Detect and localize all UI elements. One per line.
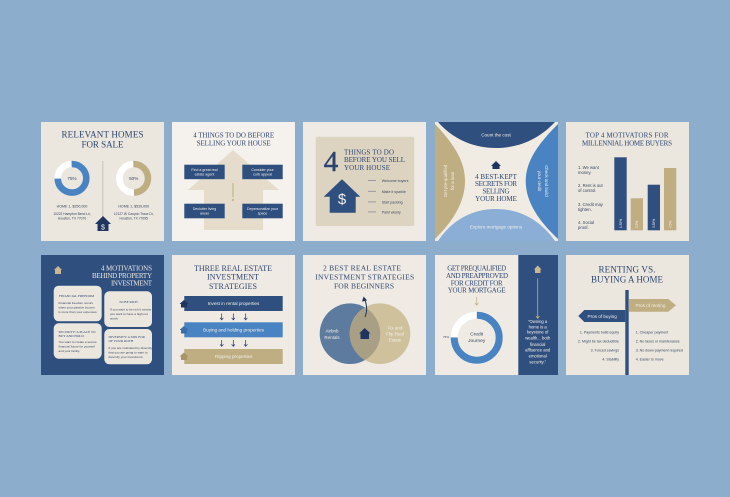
heading bbox=[582, 131, 672, 148]
venn diagram bbox=[320, 303, 410, 364]
sign: pros of buying: Pros of buying bbox=[588, 314, 617, 319]
listing: home 1 bbox=[53, 204, 91, 220]
listing: home 2: Houston, TX 77095 bbox=[120, 216, 148, 220]
heading: RENTING VS. bbox=[598, 264, 656, 274]
box: depersonalize: space bbox=[258, 212, 267, 216]
panel: 4 motivations behind property investment bbox=[41, 255, 164, 375]
panel: 4 best-kept secrets bbox=[435, 122, 558, 241]
box: declutter: Declutter living bbox=[193, 207, 216, 211]
icon: house bbox=[54, 266, 62, 274]
box: curb appeal bbox=[242, 165, 283, 179]
top segment: count the cost: Count the cost bbox=[481, 132, 512, 138]
box: declutter: areas bbox=[200, 212, 209, 216]
quote text: security.” bbox=[529, 359, 547, 364]
card: financial freedom: Financial freedom occurs bbox=[58, 301, 94, 305]
heading: YOUR MORTGAGE bbox=[448, 286, 506, 294]
card: diversity: that you are going to want to bbox=[108, 350, 148, 354]
heading: relevant homes bbox=[62, 129, 144, 149]
bar: buying and holding: Buying and holding properties bbox=[203, 328, 265, 332]
motivators list: proof. bbox=[578, 225, 589, 230]
card: diversity: OF YOUR ROTH bbox=[108, 339, 134, 343]
listing: home 1: Houston, TX 77070 bbox=[58, 216, 86, 220]
box: real estate agent: estate agent bbox=[195, 173, 214, 177]
right segment: check and build credit: Check and build bbox=[544, 165, 549, 197]
heading bbox=[344, 148, 405, 172]
motivators list: tighten. bbox=[578, 207, 592, 212]
heading: SELLING bbox=[482, 187, 510, 195]
arrow: long down bbox=[536, 278, 539, 318]
panel: top 4 motivators bbox=[566, 122, 689, 241]
venn diagram: Fix and bbox=[388, 326, 403, 330]
quote text: emotional bbox=[529, 353, 547, 358]
donut chart: credit journey: Journey bbox=[468, 338, 486, 344]
bar chart bbox=[614, 157, 676, 230]
right segment: check and build credit bbox=[526, 124, 558, 239]
quote text bbox=[525, 319, 551, 364]
list: buying bbox=[578, 330, 619, 362]
motivators list: 4. Social bbox=[578, 220, 594, 225]
list: renting: 4. Easier to move bbox=[636, 358, 664, 362]
card: to be rich: worth. bbox=[110, 316, 119, 320]
arrow: curved bbox=[362, 298, 367, 317]
heading bbox=[446, 264, 508, 294]
list: renting bbox=[636, 330, 683, 362]
heading: relevant homes: FOR SALE bbox=[82, 139, 124, 149]
card: diversity: diversify your investment. bbox=[108, 355, 144, 359]
venn diagram: Airbnb bbox=[325, 328, 339, 334]
card: security: SECURITY: A PLACE TO bbox=[58, 330, 96, 334]
heading bbox=[194, 264, 272, 291]
house shape bbox=[188, 150, 279, 230]
motivators list: 2. Rent is out bbox=[578, 183, 604, 188]
heading: relevant homes: RELEVANT HOMES bbox=[62, 129, 144, 139]
card: security: You want to create a secure bbox=[58, 340, 97, 344]
card: to be rich: If you want to be rich it means bbox=[110, 308, 152, 312]
heading bbox=[315, 264, 414, 290]
card: financial freedom: when your passive income bbox=[58, 306, 95, 310]
icon: house with dollar: $ bbox=[338, 191, 347, 208]
heading: 4 BEST-KEPT bbox=[475, 173, 518, 181]
heading bbox=[193, 132, 274, 148]
icon: house with dollar: $ bbox=[101, 224, 105, 232]
quote text: keystone of bbox=[527, 330, 549, 335]
checklist: Paint wisely bbox=[382, 210, 401, 214]
panel: 4 things to do before selling your house bbox=[172, 122, 295, 241]
panel: three real estate investment strategies bbox=[172, 255, 295, 375]
card: financial freedom: is more than your expenses. bbox=[58, 310, 98, 314]
donut chart: credit journey bbox=[443, 314, 500, 361]
card: diversity: If you are motivated by diversity bbox=[108, 346, 152, 350]
heading: TOP 4 MOTIVATORS FOR bbox=[586, 131, 669, 139]
listing: home 2: HOME 1, $539,000 bbox=[118, 204, 149, 208]
bar chart: 3.35% bbox=[652, 219, 656, 228]
donut chart: credit journey: 75% bbox=[443, 335, 449, 339]
heading bbox=[92, 265, 153, 287]
card: security: and your family. bbox=[58, 349, 80, 353]
panel: renting vs buying bbox=[566, 255, 689, 375]
card: to be rich: TO BE RICH bbox=[119, 300, 138, 304]
box: depersonalize: Depersonalize your bbox=[247, 207, 279, 211]
icon: house bbox=[359, 328, 370, 339]
list: buying: 4. Stability bbox=[602, 358, 619, 362]
heading: GET PREQUALIFIED bbox=[447, 264, 506, 272]
panel: relevant homes for sale bbox=[41, 122, 164, 241]
checklist bbox=[368, 179, 409, 214]
listing: home 1: HOME 1, $250,000 bbox=[57, 204, 87, 208]
quote text: “Owning a bbox=[528, 319, 548, 324]
venn diagram: Estate bbox=[389, 338, 402, 342]
motivators list: 3. Credit may bbox=[578, 202, 604, 207]
card: financial freedom bbox=[54, 286, 102, 321]
motivators list: of control. bbox=[578, 188, 596, 193]
heading: BEHIND PROPERTY bbox=[92, 272, 152, 280]
venn diagram: Rentals bbox=[324, 335, 340, 340]
panel: 2 best strategies bbox=[303, 255, 426, 375]
heading: THINGS TO DO bbox=[344, 148, 394, 156]
left segment: get pre-qualified bbox=[435, 124, 465, 239]
big numeral 4: 4 bbox=[324, 146, 339, 178]
motivators list: money. bbox=[578, 170, 591, 175]
list: renting: 1. Cheaper payment bbox=[636, 330, 668, 334]
box: real estate agent bbox=[184, 165, 225, 179]
arrow: down bbox=[475, 297, 478, 305]
heading: SELLING YOUR HOUSE bbox=[197, 140, 271, 148]
donut chart: 50%: 50% bbox=[129, 176, 138, 181]
icon: house bbox=[534, 266, 542, 273]
card: financial freedom: FINANCIAL FREEDOM bbox=[59, 294, 94, 298]
heading: YOUR HOME bbox=[475, 195, 517, 203]
list: buying: 1. Payments build equity bbox=[580, 330, 619, 334]
heading: SECRETS FOR bbox=[475, 180, 517, 188]
arrows bbox=[220, 314, 247, 320]
bar: flipping: Flipping properties bbox=[215, 354, 253, 359]
icon: house bbox=[491, 161, 501, 169]
box: real estate agent: Find a great real bbox=[191, 168, 218, 172]
heading: BEFORE YOU SELL bbox=[344, 156, 405, 164]
heading: INVESTMENT STRATEGIES bbox=[315, 272, 414, 281]
card: security: BUY AND HOLD bbox=[58, 334, 84, 338]
heading: YOUR HOUSE bbox=[344, 164, 390, 172]
heading: MILLENNIAL HOME BUYERS bbox=[582, 140, 672, 148]
listing: home 1: 10222 Hampton Bend Ln, bbox=[53, 212, 91, 216]
list: renting: 3. No down payment required bbox=[636, 348, 683, 352]
left segment: get pre-qualified: for a loan bbox=[450, 171, 455, 190]
card: diversity bbox=[104, 329, 152, 364]
signpost pole bbox=[625, 290, 629, 375]
checklist: Welcome buyers bbox=[382, 179, 409, 183]
heading: FOR CREDIT FOR bbox=[451, 279, 503, 287]
heading: FOR BEGINNERS bbox=[334, 281, 394, 290]
heading: AND PREAPPROVED bbox=[446, 272, 508, 280]
right segment: check and build credit: your credit bbox=[537, 171, 542, 192]
panel: 4 things before you sell bbox=[303, 122, 426, 241]
venn diagram: Flip Real bbox=[386, 332, 404, 336]
card: to be rich: you want to have a high net bbox=[110, 312, 148, 316]
card: diversity: DIVERSITY: A MIX FOR bbox=[108, 335, 146, 339]
list: buying: 3. Forced savings bbox=[591, 348, 619, 352]
heading: 4 MOTIVATIONS bbox=[101, 265, 152, 273]
heading: 4 THINGS TO DO BEFORE bbox=[193, 132, 274, 140]
checklist: Make it sparkle bbox=[382, 190, 406, 194]
heading: STRATEGIES bbox=[209, 282, 257, 291]
heading: 2 BEST REAL ESTATE bbox=[323, 264, 401, 273]
left segment: get pre-qualified: Get pre-qualified bbox=[443, 164, 448, 197]
quote text: wealth... both bbox=[525, 336, 551, 341]
bar: rental properties: Invest in rental properties bbox=[208, 301, 260, 306]
motivators list bbox=[578, 165, 604, 230]
box: curb appeal: curb appeal bbox=[253, 173, 272, 177]
panel: get prequalified bbox=[435, 255, 558, 375]
quote text: home is a bbox=[529, 325, 547, 330]
heading: INVESTMENT bbox=[111, 279, 153, 287]
box: curb appeal: Consider your bbox=[251, 168, 274, 172]
quote text: financial bbox=[530, 342, 545, 347]
card: security: financial future for yourself bbox=[58, 344, 95, 348]
list: buying: 2. Might be tax deductible bbox=[578, 340, 619, 344]
heading: INVESTMENT bbox=[207, 273, 259, 282]
box: declutter bbox=[184, 204, 225, 218]
heading bbox=[475, 173, 518, 203]
heading bbox=[591, 264, 664, 284]
listing: home 2 bbox=[114, 204, 154, 220]
checklist: Start packing bbox=[382, 200, 403, 204]
card: security bbox=[54, 323, 102, 359]
donut chart: 75%: 75% bbox=[67, 176, 77, 181]
heading: BUYING A HOME bbox=[591, 274, 664, 284]
bar chart: 4.5% bbox=[668, 221, 672, 228]
box: depersonalize bbox=[242, 204, 283, 218]
heading: THREE REAL ESTATE bbox=[194, 264, 272, 273]
sign: pros of renting: Pros of renting bbox=[636, 303, 666, 308]
card: to be rich bbox=[104, 291, 152, 327]
motivators list: 1. We want bbox=[578, 165, 600, 170]
quote text: affluence and bbox=[525, 348, 551, 353]
exclamation mark bbox=[232, 183, 234, 201]
bar chart: 1.35% bbox=[619, 219, 623, 228]
donut chart: credit journey: Credit bbox=[470, 332, 484, 338]
list: renting: 2. No taxes or maintenance bbox=[636, 340, 680, 344]
side panel: quote bbox=[518, 255, 558, 375]
bottom segment: explore mortgage options: Explore mortgage options bbox=[470, 224, 523, 230]
listing: home 2: 12127 W Canyon Trace Dr, bbox=[114, 212, 154, 216]
bar chart: 2.5% bbox=[635, 221, 639, 228]
arrows bbox=[220, 340, 247, 346]
